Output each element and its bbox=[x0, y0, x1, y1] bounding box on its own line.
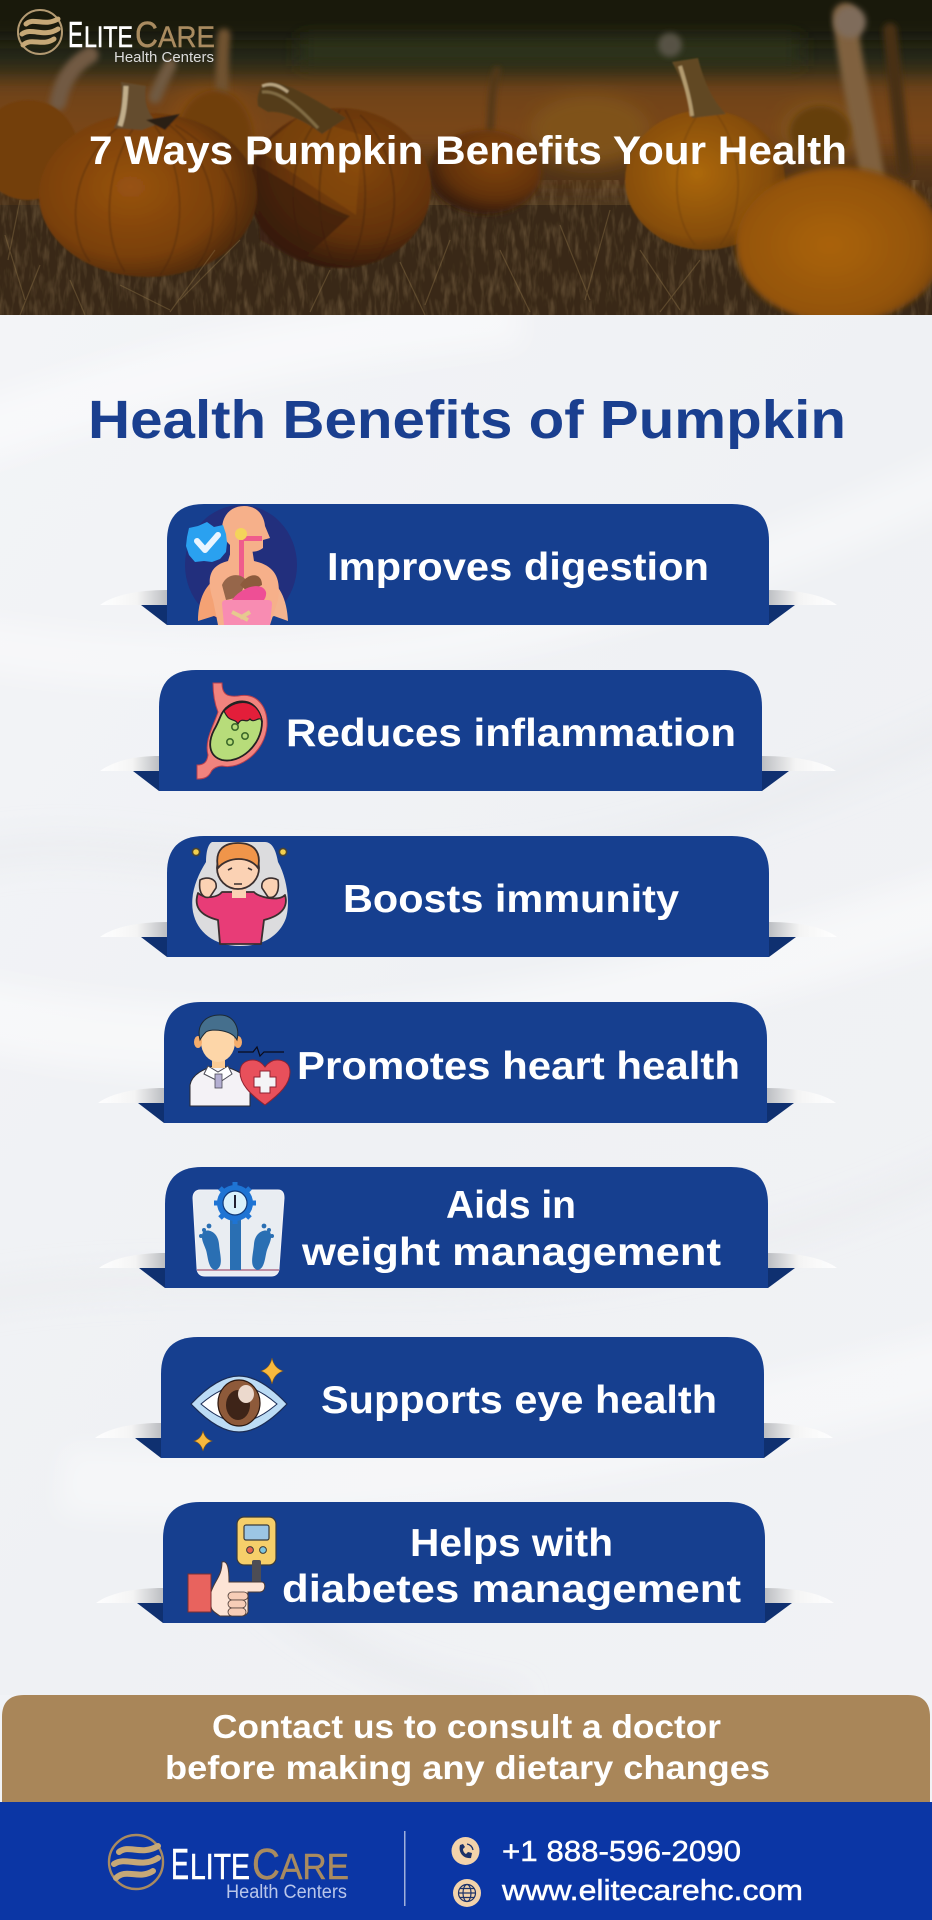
label: Supports eye health bbox=[321, 1379, 717, 1422]
heading: Health Benefits of Pumpkin bbox=[88, 390, 846, 450]
banner: Aids in weight management bbox=[99, 1167, 837, 1288]
label: line one: Helps with bbox=[410, 1522, 613, 1565]
logo: header Elite Care: LITE bbox=[84, 21, 133, 54]
phone number: +1 888-596-2090 bbox=[502, 1836, 741, 1868]
title: 7 Ways Pumpkin Benefits Your Health bbox=[89, 129, 847, 173]
text line two: before making any dietary changes bbox=[165, 1749, 770, 1786]
logo: footer Elite Care: E bbox=[171, 1840, 189, 1889]
panel: footer bbox=[0, 1802, 932, 1920]
logo: header Elite Care: E bbox=[68, 14, 83, 55]
label: Promotes heart health bbox=[297, 1045, 740, 1088]
logo: footer Elite Care: LITE bbox=[190, 1846, 250, 1887]
banner: Helps with diabetes management bbox=[96, 1502, 834, 1623]
banner: Reduces inflammation bbox=[100, 670, 836, 791]
logo: header Elite Care: ARE bbox=[158, 21, 215, 54]
label: Reduces inflammation bbox=[286, 712, 736, 755]
icon: glucose meter in hand bbox=[188, 1517, 276, 1616]
icon: eye with sparkles bbox=[191, 1358, 287, 1451]
banner: Supports eye health bbox=[95, 1337, 833, 1458]
panel: contact call to action bbox=[2, 1695, 930, 1802]
logo: footer Elite Care: C bbox=[252, 1840, 280, 1889]
banner: Boosts immunity bbox=[100, 836, 837, 957]
panel: light wavy background bbox=[0, 315, 932, 1700]
label: line two: diabetes management bbox=[282, 1568, 741, 1611]
logo: header Elite Care bbox=[18, 10, 215, 66]
label: line two: weight management bbox=[301, 1231, 721, 1274]
logo: footer Elite Care bbox=[109, 1835, 349, 1903]
logo: header Elite Care: Health Centers bbox=[114, 49, 214, 66]
website: www.elitecarehc.com bbox=[501, 1875, 803, 1907]
icon: man with heart bbox=[190, 1015, 290, 1106]
banner: Improves digestion bbox=[100, 504, 837, 625]
banner: Promotes heart health bbox=[98, 1002, 836, 1123]
panel: header photo of pumpkins bbox=[0, 0, 932, 323]
label: Improves digestion bbox=[327, 546, 709, 589]
label: Boosts immunity bbox=[343, 878, 679, 921]
icon: globe bbox=[453, 1879, 481, 1907]
icon: phone bbox=[452, 1837, 480, 1865]
logo: footer Elite Care: ARE bbox=[280, 1846, 349, 1887]
icon: stomach bbox=[197, 683, 267, 779]
logo: header Elite Care: C bbox=[135, 14, 158, 55]
text line one: Contact us to consult a doctor bbox=[212, 1708, 721, 1745]
icon: weight scale bbox=[193, 1182, 284, 1276]
label: line one: Aids in bbox=[446, 1184, 576, 1227]
icon: strong person bbox=[192, 842, 288, 946]
logo: footer Elite Care: Health Centers bbox=[226, 1882, 347, 1903]
icon: digestive system bbox=[185, 505, 297, 625]
